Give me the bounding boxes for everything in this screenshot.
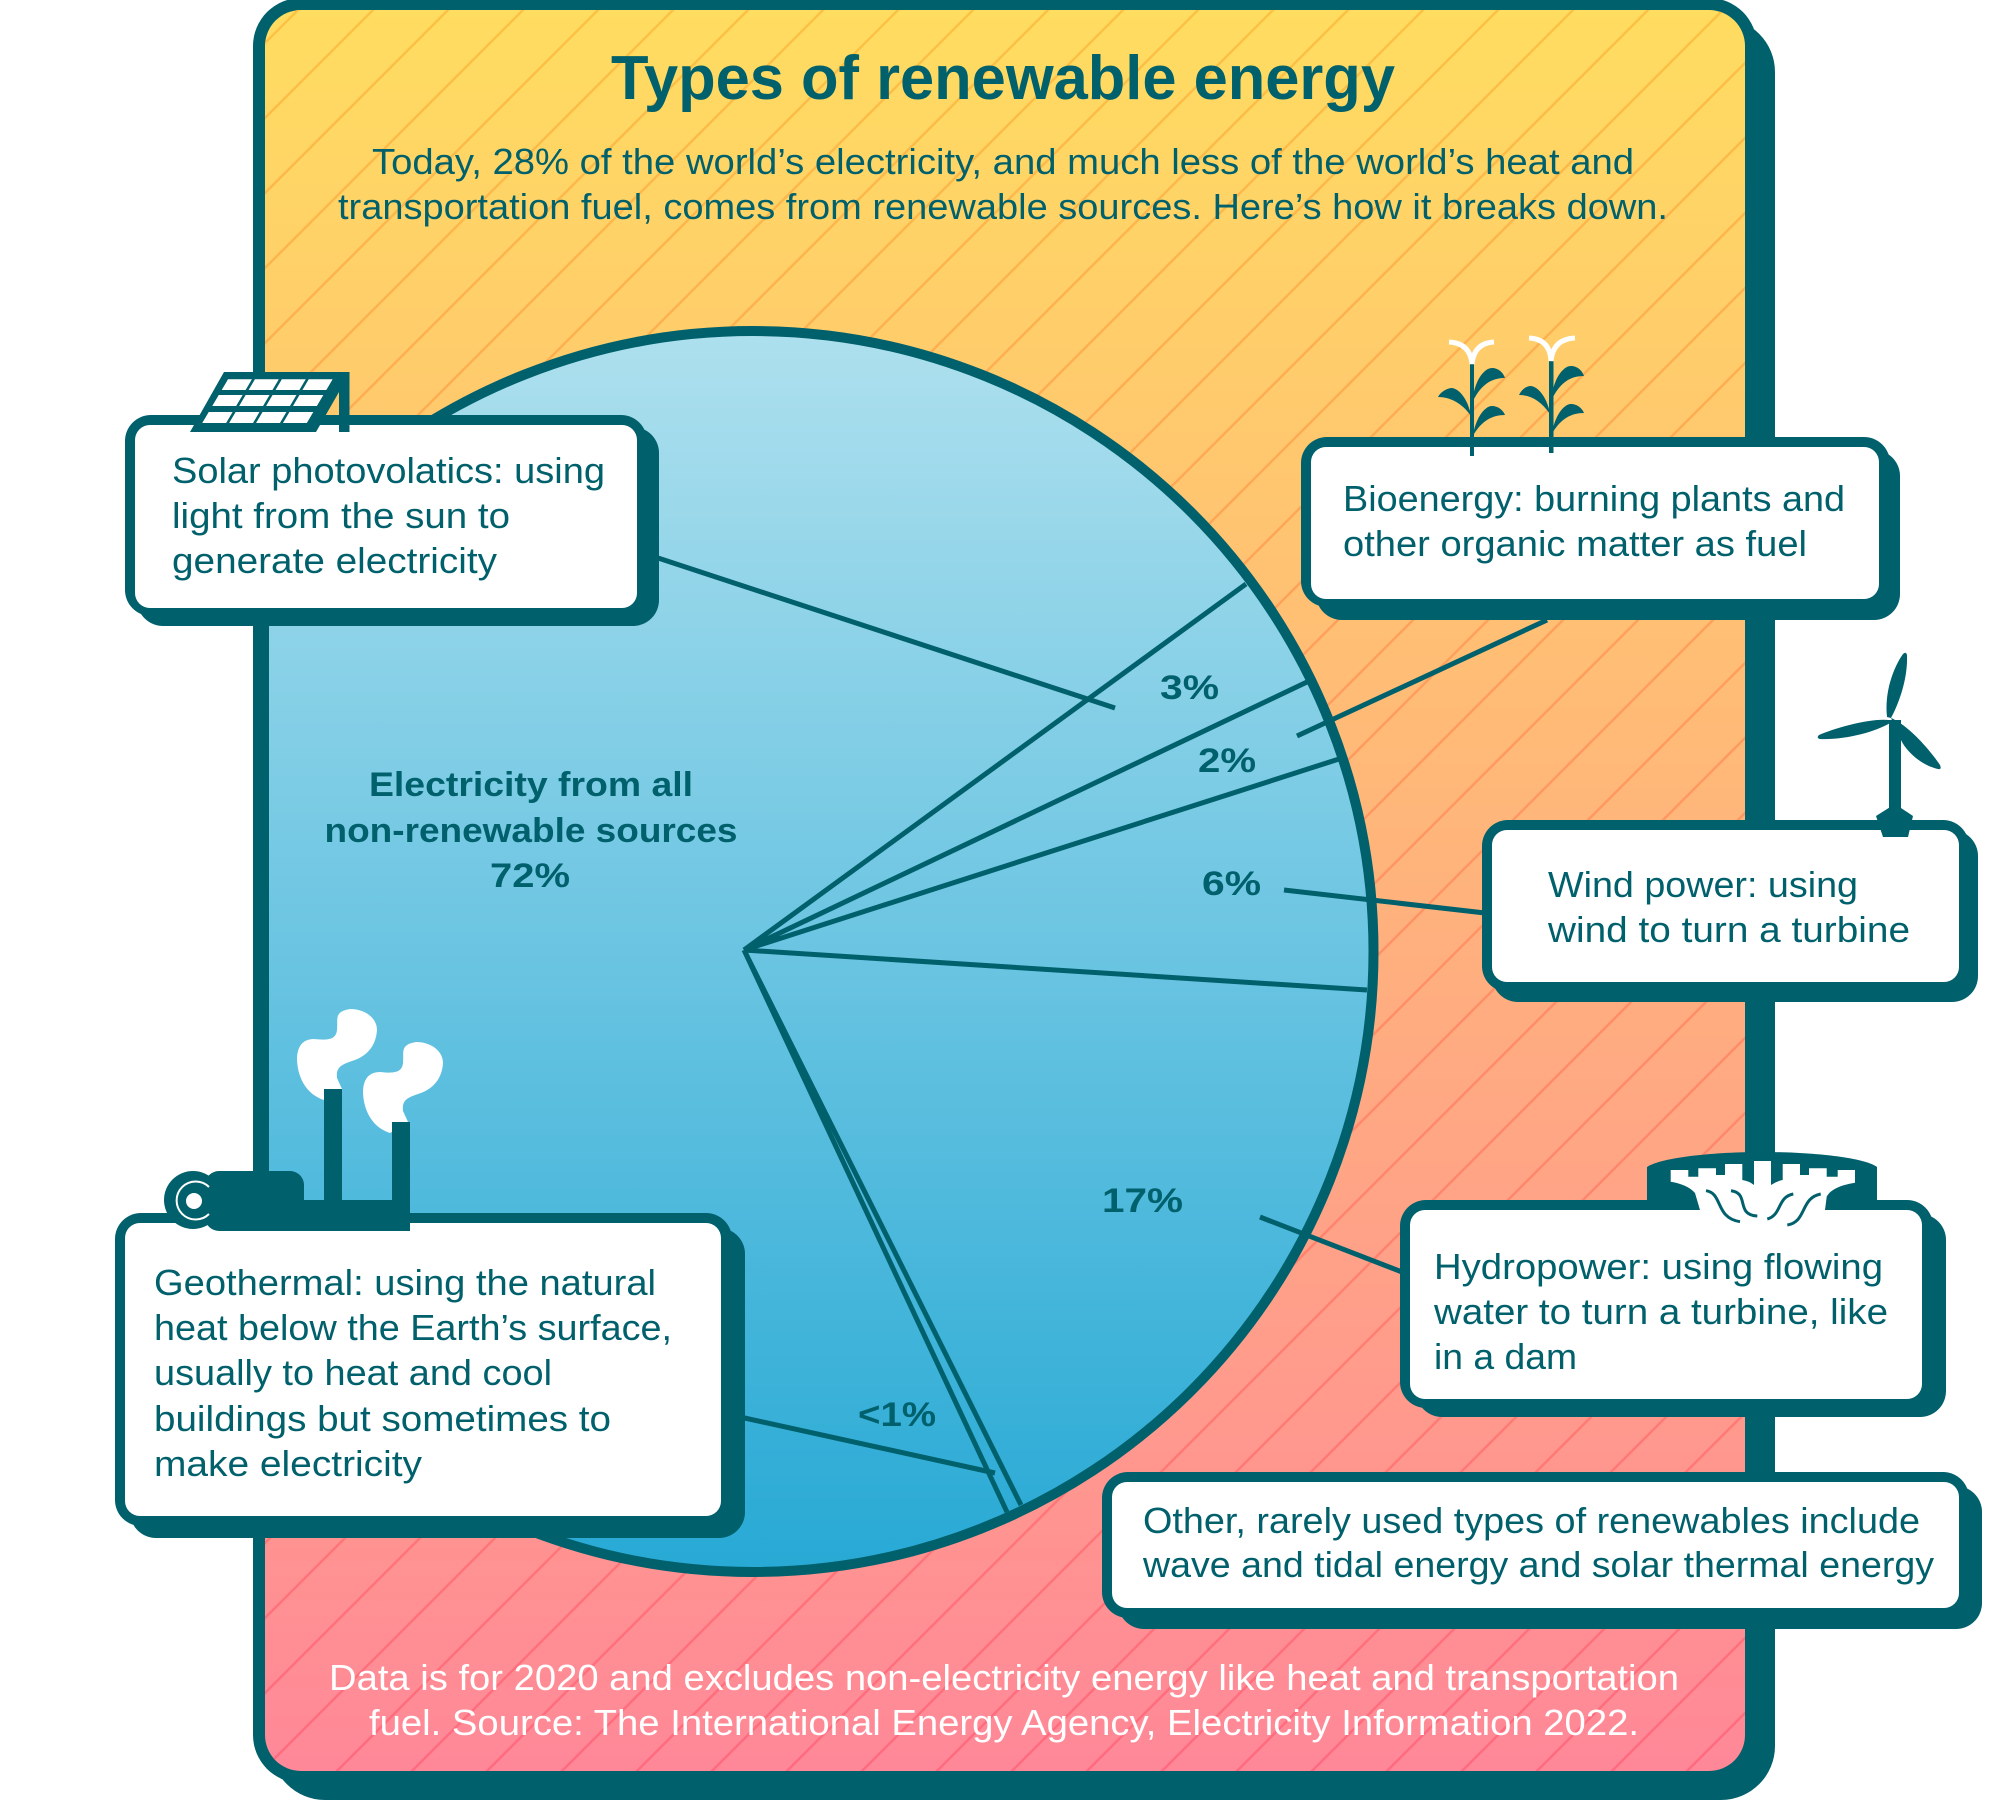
panel: background card	[253, 0, 1775, 1800]
footnote: source: fuel. Source: The International Energy Agency, Electricity Information 2022.	[369, 1702, 1639, 1743]
callout: other renewables: wave and tidal energy and solar thermal energy	[1142, 1544, 1934, 1585]
callout: bioenergy: other organic matter as fuel	[1343, 523, 1807, 564]
label: non-renewable share	[324, 766, 738, 895]
callout: geothermal: make electricity	[154, 1443, 422, 1484]
callout: wind: Wind power: using	[1548, 864, 1858, 905]
callout: wind: wind to turn a turbine	[1547, 909, 1910, 950]
callout: hydropower	[1400, 1200, 1946, 1417]
label: 3%: 3%	[1160, 669, 1219, 707]
label: non-renewable share: 72%	[490, 857, 570, 895]
callout: hydropower: Hydropower: using flowing	[1434, 1246, 1883, 1287]
intro text: Today, 28% of the world’s electricity, and much less of the world’s heat and	[372, 141, 1634, 182]
label: non-renewable share: non-renewable sources	[324, 812, 738, 850]
label: less than 1%: <1%	[858, 1396, 936, 1434]
callout: geothermal: usually to heat and cool	[154, 1352, 552, 1393]
callout: geothermal: buildings but sometimes to	[154, 1398, 611, 1439]
leader lines	[655, 557, 1547, 1473]
callout: geothermal: Geothermal: using the natural	[154, 1262, 656, 1303]
callout: solar: Solar photovolatics: using	[172, 450, 605, 491]
label: non-renewable share: Electricity from all	[369, 766, 693, 804]
callout: bioenergy: Bioenergy: burning plants and	[1343, 478, 1845, 519]
title: Types of renewable energy	[611, 44, 1396, 113]
callout: other renewables	[1102, 1472, 1982, 1629]
label: 6%: 6%	[1202, 865, 1261, 903]
icon: geothermal plant	[164, 1009, 443, 1231]
callout: wind	[1482, 820, 1978, 1002]
icon: bioenergy plants	[1438, 338, 1584, 456]
callout: geothermal: heat below the Earth’s surface,	[154, 1307, 672, 1348]
callout: bioenergy	[1301, 437, 1900, 620]
pie slice dividers	[744, 584, 1367, 1512]
icon: wind turbine	[1818, 653, 1941, 837]
intro text	[338, 141, 1668, 227]
callout: geothermal	[115, 1213, 745, 1538]
intro text: transportation fuel, comes from renewable sources. Here’s how it breaks down.	[338, 186, 1668, 227]
callout: solar: generate electricity	[172, 540, 497, 581]
icon: hydro dam	[1647, 1152, 1877, 1225]
callout: other renewables: Other, rarely used types of renewables include	[1143, 1500, 1920, 1541]
label: 17%: 17%	[1102, 1182, 1183, 1220]
footnote: source	[329, 1657, 1679, 1743]
callout: hydropower: water to turn a turbine, like	[1433, 1291, 1888, 1332]
callout: solar	[125, 415, 659, 626]
callout: solar: light from the sun to	[172, 495, 510, 536]
label: 2%: 2%	[1198, 742, 1256, 780]
icon: solar panel	[190, 372, 350, 432]
footnote: source: Data is for 2020 and excludes non-electricity energy like heat and transportation	[329, 1657, 1679, 1698]
callout: hydropower: in a dam	[1434, 1336, 1577, 1377]
chart: pie of electricity sources	[132, 331, 1374, 1572]
